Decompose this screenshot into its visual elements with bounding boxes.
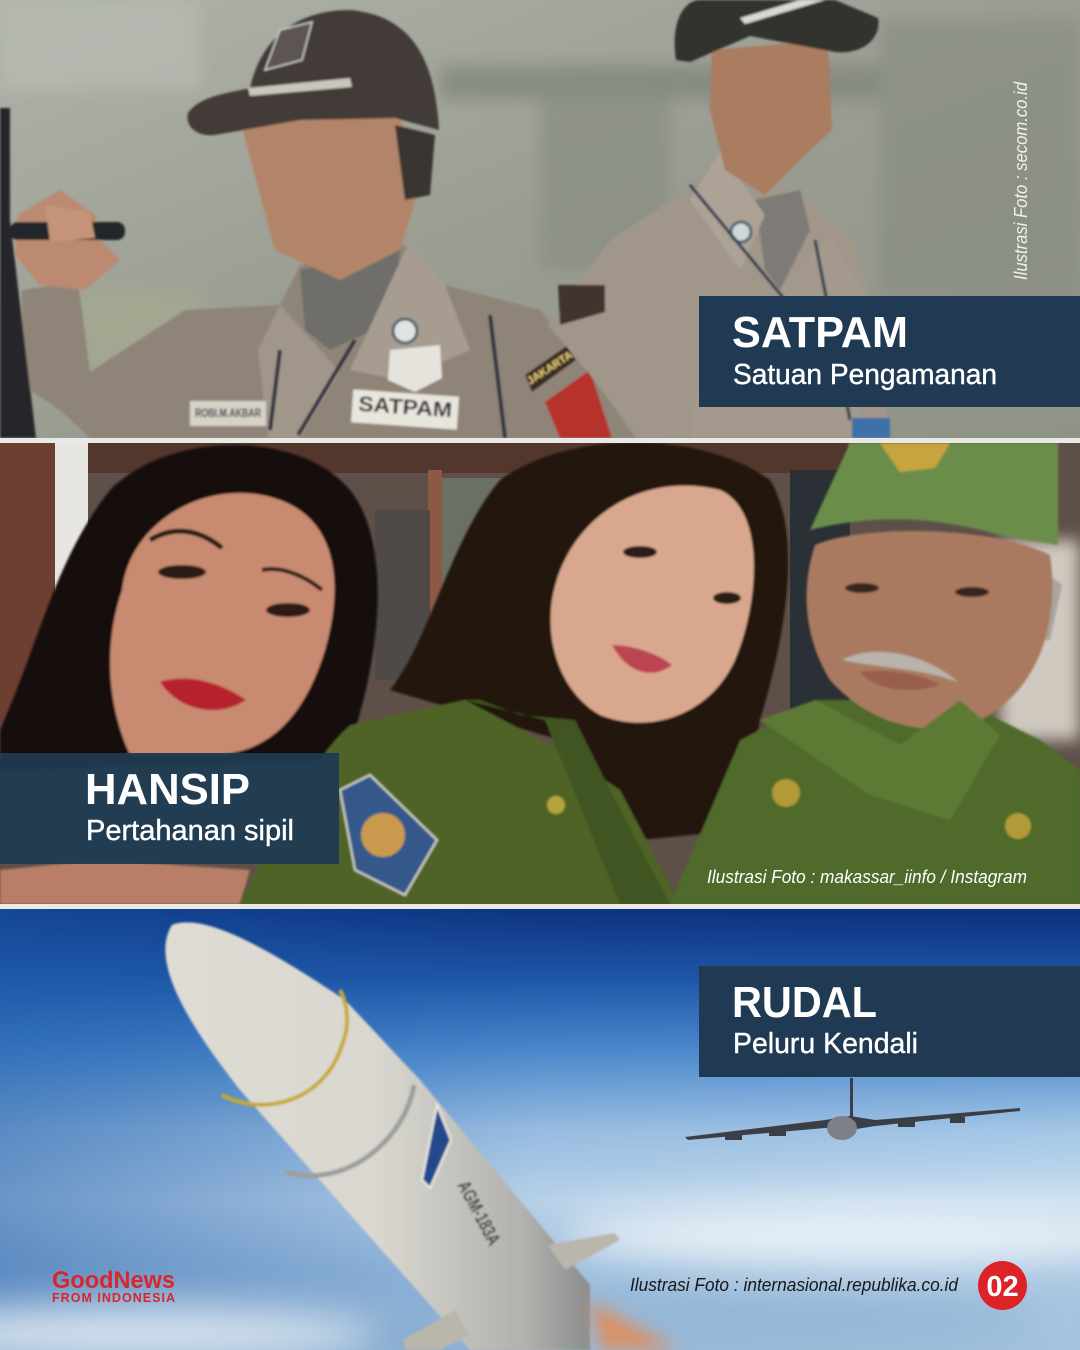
photo: old man on the right [670, 443, 1080, 904]
credit: hansip photo: Ilustrasi Foto : makassar_iinfo / Instagram [707, 867, 1027, 887]
photo: guard on the left: JAKARTA [525, 349, 575, 388]
label: SATPAM [699, 296, 1080, 407]
label: HANSIP: HANSIP [85, 765, 250, 814]
photo: guard on the left: ROBI.M.AKBAR [195, 406, 261, 420]
label: HANSIP: Pertahanan sipil [86, 815, 294, 847]
photo: guard on the left [0, 10, 635, 438]
label: HANSIP [0, 753, 339, 864]
photo: guard on the right [548, 0, 890, 438]
panel: satpam photo [0, 0, 1080, 438]
page number badge [978, 1261, 1027, 1310]
label: RUDAL: Peluru Kendali [733, 1028, 918, 1060]
photo: missile: AGM-183A [453, 1177, 504, 1249]
photo: woman on the left [0, 445, 378, 904]
photo: guard on the left: SATPAM [357, 393, 453, 422]
panel: hansip photo [0, 442, 1080, 904]
panel: rudal photo [0, 909, 1080, 1350]
label: RUDAL [699, 966, 1080, 1077]
label: SATPAM: SATPAM [732, 308, 908, 357]
panel separators [0, 438, 1080, 909]
photo: bomber aircraft [685, 1078, 1020, 1140]
page number badge: 02 [986, 1271, 1019, 1303]
logo: GoodNews from Indonesia: GoodNews [52, 1267, 175, 1294]
credit: rudal photo: Ilustrasi Foto : internasional.republika.co.id [630, 1275, 959, 1295]
photo: missile [165, 922, 680, 1350]
label: SATPAM: Satuan Pengamanan [733, 359, 997, 391]
logo: GoodNews from Indonesia: FROM INDONESIA [52, 1291, 175, 1305]
photo: woman in the middle [240, 442, 788, 904]
credit: satpam photo: Ilustrasi Foto : secom.co.id [1011, 81, 1031, 280]
label: RUDAL: RUDAL [732, 978, 877, 1027]
